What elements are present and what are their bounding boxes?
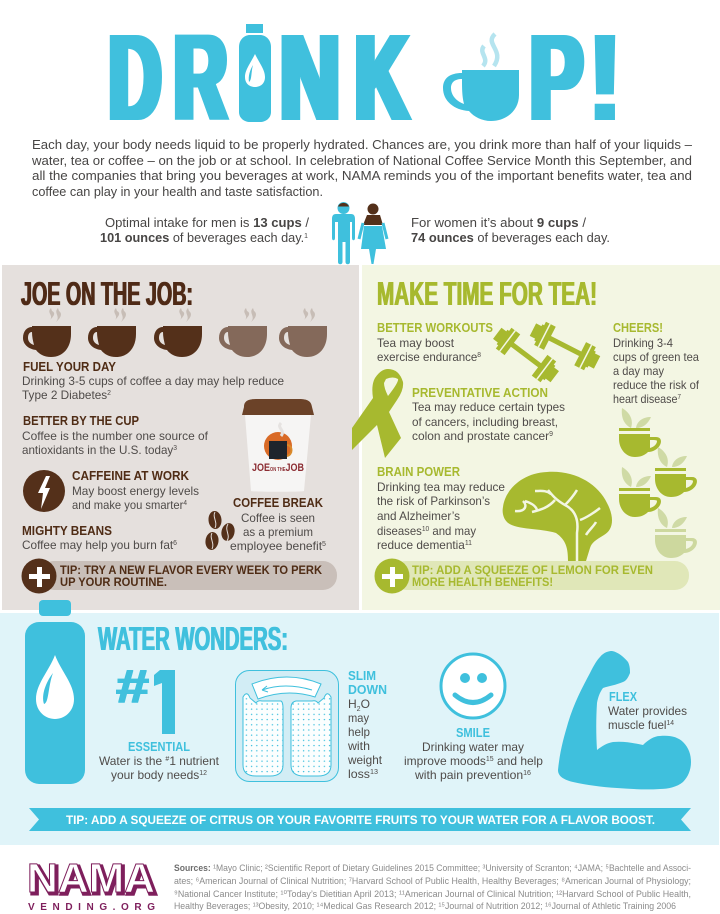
- women intake text: For women it’s about 9 cups /: [411, 215, 586, 230]
- text: better by the cup: Coffee is the number one source of: [22, 429, 209, 443]
- text: caffeine at work: and make you smarter: [72, 498, 191, 512]
- tip: tea: TIP: ADD A SQUEEZE OF LEMON FOR EVEN: [412, 563, 653, 577]
- text: brain power: 11: [465, 540, 472, 547]
- text: mighty beans: [22, 524, 177, 552]
- heading: joe on the job: JOE ON THE JOB:: [21, 275, 193, 312]
- tip: coffee: [22, 558, 337, 594]
- text: slim down: 2: [357, 706, 361, 713]
- text: cheers: Drinking 3-4: [613, 336, 673, 350]
- logo: nama vending: NAMA: [29, 857, 157, 903]
- intro paragraph: water, tea or coffee – on the job or at school. In celebration of National Coffee Service Month this September, and: [31, 153, 692, 168]
- text: preventative action: PREVENTATIVE ACTION: [412, 386, 548, 400]
- tip: coffee: TIP: TRY A NEW FLAVOR EVERY WEEK TO PERK: [60, 563, 322, 577]
- panel: water wonders: [0, 600, 719, 845]
- text: flex: 14: [666, 720, 674, 727]
- icon: steaming cup letter U: [443, 34, 519, 121]
- text: preventative action: colon and prostate cancer: [412, 429, 550, 443]
- text: fuel your day: FUEL YOUR DAY: [23, 360, 117, 374]
- text: smile: Drinking water may: [422, 740, 524, 754]
- text: slim down: DOWN: [348, 683, 387, 697]
- icon: weight scale: [236, 670, 338, 782]
- sources: ⁹National Cancer Institute; ¹⁰Today’s Dietitian April 2013; ¹¹American Journal of Clinical Nutrition; ¹²Harvard School of Public Health,: [174, 889, 691, 900]
- text: essential: Water is the: [99, 754, 163, 768]
- panel: make time for tea: [352, 265, 720, 610]
- tip: water ribbon: TIP: ADD A SQUEEZE OF CITRUS OR YOUR FAVORITE FRUITS TO YOUR WATER FOR A FLAVOR BOOST.: [66, 813, 655, 827]
- text: better workouts: exercise endurance: [377, 350, 482, 364]
- text: slim down: [347, 669, 387, 781]
- text: brain power: reduce dementia: [377, 538, 466, 552]
- text: cheers: cups of green tea: [613, 350, 699, 364]
- text: smile: 15: [486, 756, 494, 763]
- text: flex: muscle fuel: [608, 718, 669, 732]
- text: better workouts: Tea may boost: [377, 336, 455, 350]
- women intake text: 74 ounces of beverages each day.: [411, 230, 610, 245]
- text: slim down: may: [348, 711, 369, 725]
- text: smile: with pain prevention: [415, 768, 522, 782]
- text: essential: 12: [199, 770, 207, 777]
- text: fuel your day: Type 2 Diabetes: [22, 388, 109, 402]
- heading: make time for tea: MAKE TIME FOR TEA!: [377, 275, 597, 312]
- logo: nama vending: NAMA: [27, 855, 155, 901]
- text: caffeine at work: May boost energy levels: [72, 484, 199, 498]
- icon: water bottle letter I: [239, 24, 271, 122]
- icon: man and woman: [332, 202, 387, 264]
- icon: flexed arm: [558, 651, 691, 789]
- tip: coffee: UP YOUR ROUTINE.: [60, 575, 167, 589]
- icon: lightning bolt: [23, 470, 65, 512]
- icon: brain: [503, 472, 612, 561]
- text: flex: Water provides: [608, 704, 687, 718]
- men intake text: 101 ounces of beverages each day.: [100, 230, 307, 245]
- text: slim down: O: [361, 697, 370, 711]
- text: fuel your day: Drinking 3-5 cups of coffee a day may help reduce: [22, 374, 284, 388]
- text: preventative action: [412, 386, 565, 443]
- title: !: [590, 10, 620, 147]
- text: cheers: 7: [678, 394, 681, 401]
- text: brain power: 10: [422, 526, 429, 533]
- text: coffee break: 5: [322, 541, 326, 548]
- text: brain power: diseases: [377, 524, 424, 538]
- men intake text: Optimal intake for men is 13 cups /: [105, 215, 309, 230]
- text: better workouts: 8: [477, 352, 481, 359]
- logo: nama vending: VENDING.ORG: [28, 902, 155, 913]
- text: better workouts: BETTER WORKOUTS: [377, 321, 493, 335]
- text: brain power: and Alzheimer’s: [377, 509, 460, 523]
- icon: tea cups: [619, 408, 697, 558]
- text: coffee break: as a premium: [243, 525, 313, 539]
- text: better by the cup: [22, 414, 209, 457]
- text: slim down: SLIM: [348, 669, 376, 683]
- intro paragraph: [31, 137, 693, 199]
- text: fuel your day: [22, 360, 284, 402]
- women intake text: [411, 215, 610, 245]
- men intake text: 1: [304, 233, 308, 240]
- text: brain power: and may: [429, 524, 476, 538]
- text: caffeine at work: CAFFEINE AT WORK: [72, 469, 189, 483]
- text: mighty beans: MIGHTY BEANS: [22, 524, 112, 538]
- text: coffee break: employee benefit: [230, 539, 321, 553]
- text: smile: and help: [494, 754, 543, 768]
- panel: joe on the job: [2, 265, 359, 610]
- icon: coffee cup with logo: [242, 399, 314, 492]
- text: slim down: help: [348, 725, 370, 739]
- text: number one: #: [116, 660, 149, 712]
- text: slim down: 13: [370, 769, 378, 776]
- text: slim down: with: [347, 739, 370, 753]
- text: coffee break: Coffee is seen: [241, 511, 315, 525]
- title: K: [355, 10, 409, 147]
- icon: smiley face: [441, 654, 505, 718]
- text: preventative action: 9: [549, 431, 553, 438]
- text: cheers: a day may: [613, 364, 664, 378]
- text: number one: [116, 660, 175, 734]
- tip: tea: [374, 558, 689, 594]
- text: essential: 1 nutrient: [169, 754, 220, 768]
- icon: water bottle: [25, 600, 85, 784]
- text: cheers: [613, 321, 700, 406]
- text: smile: [404, 726, 543, 782]
- title: [109, 10, 620, 147]
- tip: water ribbon: [29, 808, 691, 831]
- heading: water wonders: WATER WONDERS:: [98, 620, 288, 657]
- text: brain power: Drinking tea may reduce: [377, 480, 505, 494]
- icon: coffee cup with logo: JOEON THEJOB: [252, 462, 304, 474]
- men intake text: [100, 215, 309, 245]
- text: smile: SMILE: [456, 726, 490, 740]
- text: brain power: BRAIN POWER: [377, 465, 460, 479]
- text: essential: your body needs: [111, 768, 200, 782]
- text: better by the cup: antioxidants in the U.S. today: [22, 443, 178, 457]
- text: mighty beans: Coffee may help you burn fat: [22, 538, 176, 552]
- text: mighty beans: 6: [173, 540, 177, 547]
- text: better by the cup: BETTER BY THE CUP: [23, 414, 139, 428]
- icon: ribbon: [352, 369, 403, 458]
- text: essential: ESSENTIAL: [128, 740, 190, 754]
- text: flex: [608, 690, 687, 732]
- text: brain power: the risk of Parkinson’s: [377, 494, 490, 508]
- text: preventative action: of cancers, including breast,: [412, 415, 558, 429]
- intro paragraph: coffee can play in your health and taste satisfaction.: [32, 184, 323, 199]
- sources: [174, 863, 691, 912]
- text: brain power: [377, 465, 505, 552]
- text: smile: improve moods: [404, 754, 486, 768]
- title: P: [530, 10, 583, 147]
- text: better by the cup: 3: [173, 445, 177, 452]
- intro paragraph: Each day, your body needs liquid to be properly hydrated. Chances are, you drink more than half of your liquids –: [32, 137, 693, 152]
- intro paragraph: all the companies that bring you beverages at work, NAMA reminds you of the important benefits water, tea and: [32, 168, 692, 183]
- text: cheers: heart disease: [613, 392, 685, 406]
- text: caffeine at work: [72, 469, 199, 512]
- title: R: [174, 10, 227, 147]
- text: cheers: reduce the risk of: [613, 378, 700, 392]
- tip: tea: MORE HEALTH BENEFITS!: [412, 575, 553, 589]
- text: slim down: weight: [347, 753, 383, 767]
- text: cheers: CHEERS!: [613, 321, 663, 335]
- text: preventative action: Tea may reduce certain types: [412, 400, 565, 414]
- text: essential: #: [165, 756, 169, 763]
- icon: dumbbells: [489, 318, 603, 387]
- text: slim down: H: [348, 697, 357, 711]
- text: essential: [99, 740, 220, 782]
- text: flex: FLEX: [609, 690, 638, 704]
- title: D: [109, 10, 161, 147]
- text: coffee break: [230, 496, 326, 553]
- text: smile: 16: [523, 770, 531, 777]
- text: coffee break: COFFEE BREAK: [233, 496, 323, 510]
- icon: coffee beans: [204, 510, 236, 551]
- text: fuel your day: 2: [107, 390, 111, 397]
- text: better workouts: [377, 321, 493, 364]
- icon: five coffee cups: [23, 308, 327, 357]
- sources: ates; ⁶American Journal of Clinical Nutrition; ⁷Harvard School of Public Health, Healthy Beverages; ⁸American Journal of Physiology;: [174, 876, 691, 887]
- text: caffeine at work: 4: [183, 500, 187, 507]
- title: N: [280, 10, 340, 147]
- sources: Healthy Beverages; ¹³Obesity, 2010; ¹⁴Medical Gas Research 2012; ¹⁵Journal of Nutrition 2012; ¹⁶Journal of Athletic Training 2006: [174, 901, 676, 912]
- text: slim down: loss: [348, 767, 369, 781]
